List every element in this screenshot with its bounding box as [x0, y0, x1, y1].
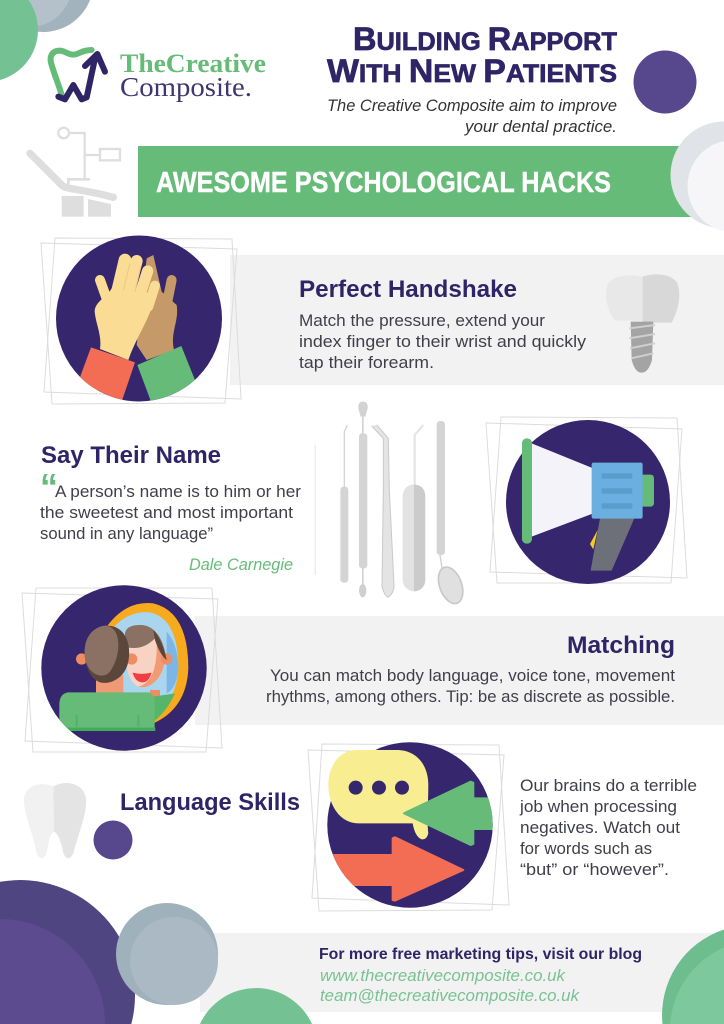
- icon: dental implant: [606, 274, 679, 373]
- body text: Match the pressure, extend your: [299, 311, 545, 330]
- title: [327, 21, 617, 89]
- panel: matching: [22, 585, 724, 752]
- frame: [486, 417, 687, 583]
- banner: awesome psychological hacks: [138, 146, 698, 217]
- logo: [51, 49, 266, 102]
- decorative circles: bottom: [0, 880, 724, 1024]
- panel: language skills: [24, 742, 697, 911]
- icon: dental chair: [30, 128, 120, 217]
- quote text: A person’s name is to him or her: [55, 482, 301, 501]
- icon: tooth with arrow: [51, 50, 105, 99]
- heading: Language Skills: [120, 789, 300, 816]
- body text: [299, 311, 587, 372]
- decorative circles: top left: [0, 0, 90, 80]
- icon: tooth: [24, 783, 86, 858]
- body text: You can match body language, voice tone, movement: [270, 666, 675, 685]
- logo wordmark: TheCreative: TheCreative: [120, 49, 266, 78]
- frame: [22, 588, 222, 752]
- body text: job when processing: [519, 797, 677, 816]
- heading: Perfect Handshake: [299, 276, 517, 303]
- logo wordmark: Composite: Composite.: [120, 72, 252, 102]
- banner: awesome psychological hacks: AWESOME PSYCHOLOGICAL HACKS: [156, 167, 611, 199]
- icon: speech bubble and arrows: [327, 742, 493, 908]
- title: WITH NEW PATIENTS: [327, 53, 617, 89]
- panel: say their name: [40, 442, 301, 574]
- body text: for words such as: [520, 839, 652, 858]
- decorative small purple circle: [94, 820, 132, 860]
- quote text: sound in any language”: [40, 524, 213, 543]
- icon: high five hands: [56, 236, 222, 403]
- tagline: The Creative Composite aim to improve: [327, 97, 617, 115]
- quote mark: “: [40, 466, 58, 507]
- frame: [41, 238, 241, 404]
- tagline: your dental practice.: [464, 118, 617, 136]
- footer website: www.thecreativecomposite.co.uk: [320, 966, 566, 985]
- decorative circles: top right: [670, 122, 724, 231]
- body text: Our brains do a terrible: [520, 776, 697, 795]
- body text: tap their forearm.: [299, 353, 434, 372]
- body text: “but” or “however”.: [520, 860, 669, 879]
- tagline: [327, 97, 617, 136]
- attribution: Dale Carnegie: [189, 556, 293, 574]
- title: BUILDING RAPPORT: [353, 21, 617, 57]
- quote text: [40, 482, 301, 543]
- body text: [266, 666, 675, 706]
- body text: [519, 776, 697, 879]
- footer heading: For more free marketing tips, visit our blog: [319, 946, 642, 963]
- icon: person looking in mirror: [41, 585, 207, 751]
- body text: negatives. Watch out: [520, 818, 680, 837]
- body text: index finger to their wrist and quickly: [299, 332, 587, 351]
- footer email: team@thecreativecomposite.co.uk: [320, 986, 580, 1005]
- heading: Matching: [567, 632, 675, 659]
- panel: footer: [200, 933, 724, 1012]
- quote text: the sweetest and most important: [40, 503, 293, 522]
- decorative purple circle: [634, 50, 696, 114]
- icon: megaphone: [486, 417, 687, 584]
- icon: dental tools: [315, 402, 467, 607]
- body text: rhythms, among others. Tip: be as discrete as possible.: [266, 687, 675, 706]
- panel: perfect handshake: [41, 236, 724, 404]
- frame: [308, 744, 509, 911]
- heading: Say Their Name: [41, 442, 221, 469]
